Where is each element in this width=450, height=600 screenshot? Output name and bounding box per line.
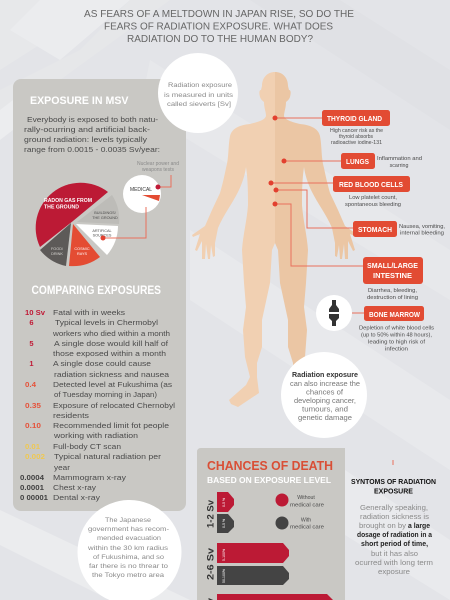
exposure comparison list: working with radiation: [53, 431, 138, 440]
callout: evacuation: of Fukushima, and so: [93, 554, 164, 561]
callout: cancer risk: tumours, and: [302, 406, 348, 414]
label: lungs: scarring: [390, 163, 408, 169]
callout: evacuation: government has recom-: [88, 526, 169, 533]
label: lungs: [341, 153, 422, 169]
callout: evacuation: far there is no threar to: [89, 563, 168, 570]
label: bone marrow: [359, 306, 434, 352]
label: thyroid gland: High cancer risk as the: [330, 128, 383, 134]
label: thyroid gland: [322, 110, 390, 146]
pie chart: radiation sources: RAYS: [77, 252, 87, 256]
pie detail: artificial sources breakdown: MEDICAL: [130, 187, 152, 193]
icon: bone joint: [316, 295, 352, 331]
pie chart: radiation sources: SOURCES: [93, 234, 112, 238]
title: [84, 8, 354, 45]
label: lungs: LUNGS: [346, 157, 369, 166]
label: stomach: Nausea, vomiting,: [399, 224, 445, 230]
label: small/large intestine: destruction of lining: [367, 295, 418, 301]
heading: exposure in msv: EXPOSURE IN MSV: [30, 95, 129, 107]
label: small/large intestine: INTESTINE: [373, 271, 412, 280]
label: red blood cells: Low platelet count,: [349, 195, 397, 201]
text block: symptoms of radiation exposure: but it has also: [371, 551, 418, 558]
callout: cancer risk: can also increase the: [290, 381, 360, 388]
label: red blood cells: RED BLOOD CELLS: [339, 180, 403, 189]
text block: symptoms of radiation exposure: ocurred with long term: [355, 560, 433, 567]
title: RADIATION DO TO THE HUMAN BODY?: [127, 33, 313, 45]
callout: evacuation: the Tokyo metro area: [92, 572, 164, 579]
exposure comparison list: 0.01: [25, 442, 40, 451]
callout: cancer risk: developing cancer,: [294, 398, 356, 405]
legend: Without: [297, 495, 315, 501]
label: small/large intestine: Diarrhea, bleeding,: [368, 288, 417, 294]
exposure intro text: Everybody is exposed to both natu-: [27, 115, 159, 124]
pie chart: radiation sources: FOOD/: [51, 247, 64, 251]
text block: symptoms of radiation exposure: a large: [408, 523, 430, 530]
exposure comparison list: 0.35: [25, 401, 41, 410]
legend: [276, 494, 324, 530]
label: small/large intestine: SMALL/LARGE: [367, 261, 418, 270]
connector lines and organ markers: [268, 116, 393, 465]
callout: evacuation: mended evacuation: [97, 535, 161, 542]
label: stomach: STOMACH: [358, 225, 392, 234]
callout: evacuation: within the 30 km radius: [87, 545, 169, 552]
pie detail: artificial sources breakdown: [100, 161, 179, 240]
legend: With: [301, 518, 311, 524]
exposure comparison list: radiation sickness and nausea: [54, 370, 170, 379]
callout: cancer risk: chances of: [306, 390, 343, 396]
pie detail: artificial sources breakdown: Nuclear power and: [137, 161, 179, 167]
heading: comparing exposures: COMPARING EXPOSURES: [32, 285, 161, 297]
exposure comparison list: 0.10: [25, 421, 41, 430]
pie chart: radiation sources: THE GROUND: [44, 204, 79, 210]
pie chart: radiation sources: BUILDINGS/: [94, 211, 117, 215]
exposure comparison list: Detected level at Fukushima (as: [53, 380, 172, 389]
pie chart: radiation sources: ARTIFICAL: [92, 229, 112, 233]
row labels: [206, 499, 216, 600]
legend: medical care: [290, 502, 324, 508]
callout: cancer risk: Radiation exposure: [292, 372, 358, 379]
exposure intro text: rally-ocurring and artificial back-: [24, 125, 151, 134]
exposure comparison list: workers who died within a month: [52, 329, 170, 338]
row labels: 2-6 Sv: [206, 547, 216, 580]
human body figure: [192, 72, 358, 407]
label: bone marrow: infection: [385, 346, 408, 352]
pie chart: radiation sources: DRINK: [51, 252, 63, 256]
exposure comparison list: Full-body CT scan: [53, 442, 121, 451]
text block: symptoms of radiation exposure: [351, 477, 436, 576]
exposure comparison list: A single dose would kill half of: [54, 339, 169, 348]
exposure comparison list: 0.4: [25, 380, 37, 389]
exposure comparison list: Typical levels in Chermobyl: [55, 318, 158, 327]
text block: symptoms of radiation exposure: Generally speaking,: [360, 505, 428, 512]
bar chart: death chances: 5-100%: [222, 549, 226, 561]
exposure comparison list: 1: [29, 359, 34, 368]
label: bone marrow: Depletion of white blood cells: [359, 326, 434, 332]
text block: symptoms of radiation exposure: EXPOSURE: [374, 486, 413, 496]
pie chart: radiation sources: RADON GAS FROM: [44, 198, 92, 204]
label: bone marrow: (up to 50% within 48 hours),: [361, 332, 432, 338]
exposure comparison list: year: [54, 463, 71, 472]
legend: medical care: [290, 524, 324, 530]
label: red blood cells: spontaneous bleeding: [345, 202, 401, 208]
exposure intro text: ground radiation: levels typically: [24, 135, 147, 144]
text block: symptoms of radiation exposure: radiation sickness is: [360, 514, 430, 521]
label: bone marrow: leading to high risk of: [368, 340, 426, 346]
exposure comparison list: 10 Sv: [25, 308, 46, 317]
exposure comparison list: Mammogram x-ray: [53, 473, 126, 482]
bar chart: death chances: 0-5 %: [222, 498, 226, 507]
subheading: based on exposure level: BASED ON EXPOSURE LEVEL: [207, 475, 331, 485]
exposure comparison list: Typical natural radiation per: [54, 452, 162, 461]
callout: sieverts: is measured in units: [164, 92, 234, 99]
title: AS FEARS OF A MELTDOWN IN JAPAN RISE, SO DO THE: [84, 8, 354, 20]
exposure comparison list: Exposure of relocated Chernobyl: [53, 401, 175, 410]
exposure comparison list: 6: [29, 318, 34, 327]
exposure comparison list: 0.002: [25, 452, 45, 461]
label: bone marrow: BONE MARROW: [369, 310, 421, 319]
callout: sieverts: [158, 53, 238, 133]
bar chart: death chances: 50-100%: [222, 569, 226, 583]
text block: symptoms of radiation exposure: dosage of radiation in a: [357, 532, 432, 539]
exposure intro text: range from 0.0015 - 0.0035 Sv/year:: [24, 145, 160, 154]
exposure comparison list: 0.0001: [20, 483, 44, 492]
exposure comparison list: Chest x-ray: [53, 483, 96, 492]
pie detail: artificial sources breakdown: weapons tests: [142, 167, 174, 173]
label: thyroid gland: thyroid absorbs: [339, 134, 373, 140]
label: lungs: Inflammation and: [377, 156, 422, 162]
label: red blood cells: [333, 176, 410, 208]
bar chart: death chances: [217, 492, 333, 600]
pie chart: radiation sources: [36, 183, 119, 266]
exposure comparison list: 5: [29, 339, 34, 348]
label: thyroid gland: radioactive iodine-131: [331, 140, 382, 146]
callout: evacuation: The Japanese: [105, 517, 151, 524]
callout: sieverts: Radiation exposure: [168, 82, 232, 89]
callout: cancer risk: genetic damage: [298, 415, 352, 422]
text block: symptoms of radiation exposure: SYNTOMS OF RADIATION: [351, 477, 436, 486]
exposure comparison list: residents: [53, 411, 89, 420]
label: stomach: internal bleeding: [400, 230, 444, 236]
label: small/large intestine: [363, 257, 423, 301]
exposure comparison list: those exposed within a month: [53, 349, 166, 358]
exposure comparison list: Recommended limit fot people: [53, 421, 169, 430]
exposure comparison list: Fatal with in weeks: [53, 308, 125, 317]
exposure comparison list: Dental x-ray: [53, 493, 100, 502]
label: stomach: [353, 221, 445, 237]
panel: chances of death: [197, 448, 345, 600]
title: FEARS OF RADIATION EXPOSURE. WHAT DOES: [104, 20, 333, 32]
exposure intro text: [24, 115, 160, 154]
text block: symptoms of radiation exposure: brought on by: [359, 523, 407, 530]
heading: chances of death: CHANCES OF DEATH: [207, 458, 333, 473]
bar chart: death chances: 0-5 %: [222, 519, 226, 528]
label: thyroid gland: THYROID GLAND: [327, 114, 383, 123]
text block: symptoms of radiation exposure: exposure: [378, 569, 410, 576]
exposure comparison list: of Tuesday morning in Japan): [54, 390, 158, 399]
row labels: 1-2 Sv: [206, 499, 216, 528]
pie chart: radiation sources: THE GROUND: [92, 216, 118, 220]
exposure comparison list: 0.0004: [20, 473, 45, 482]
callout: sieverts: called sieverts [Sv]: [167, 101, 231, 108]
exposure comparison list: [20, 308, 175, 502]
panel: exposure: [13, 79, 186, 511]
pie chart: radiation sources: COSMIC: [74, 247, 90, 251]
callout: evacuation: [78, 500, 182, 600]
exposure comparison list: A single dose could cause: [53, 359, 151, 368]
exposure comparison list: 0 00001: [20, 493, 48, 502]
callout: cancer risk: [281, 352, 367, 438]
text block: symptoms of radiation exposure: short period of time,: [361, 541, 428, 548]
